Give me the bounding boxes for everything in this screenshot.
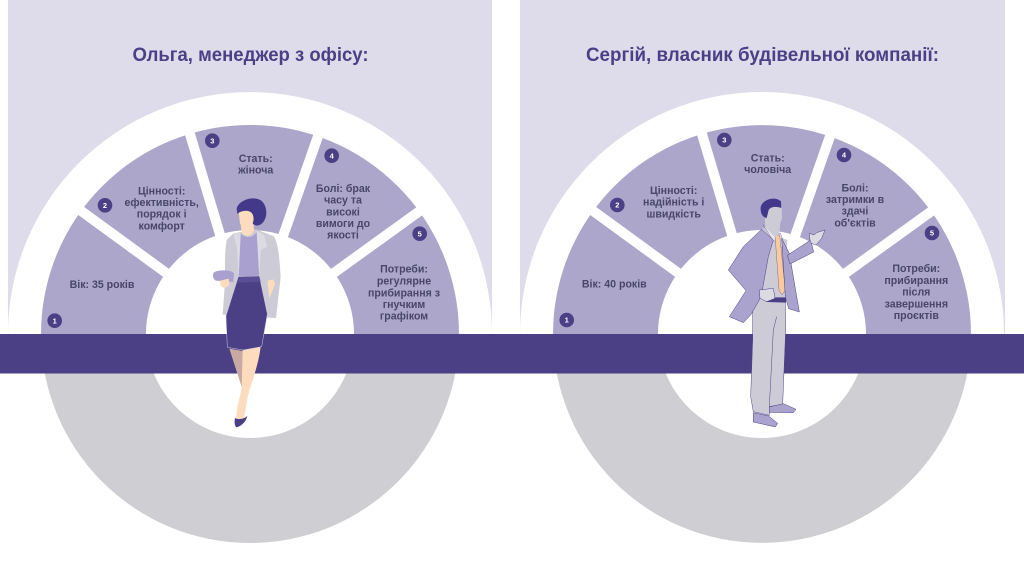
figure: man — [728, 199, 825, 427]
sector 3: gender: жіноча — [237, 165, 273, 177]
sector 2: values: 2 — [615, 201, 619, 210]
sector 5: needs: проєктів — [894, 310, 939, 322]
white semicircle: Serhii — [520, 92, 1004, 334]
sector 5: needs: графіком — [380, 311, 428, 323]
panel: Olha persona — [8, 0, 492, 543]
sector 3: gender: чоловіча — [744, 164, 791, 176]
sector 5: needs: прибирання з — [368, 287, 440, 299]
sector 4: pains: об'єктів — [834, 217, 876, 229]
sector 1: age: 1 — [565, 316, 569, 325]
horizontal band — [0, 334, 1024, 374]
sector 3: gender: Стать: — [751, 152, 785, 164]
sector 2: values — [98, 185, 199, 232]
title: Olha: Ольга, менеджер з офісу: — [132, 45, 368, 66]
sector 4: pains: вимоги до — [316, 218, 371, 230]
sector 5: needs: Потреби: — [892, 263, 940, 275]
sector 1: age — [47, 279, 135, 328]
sector 4: pains: 4 — [842, 151, 847, 160]
lavender backdrop: Serhii — [520, 0, 1005, 334]
sector 4: pains: часу та — [324, 195, 362, 207]
sector 4: pains: Болі: брак — [316, 183, 371, 195]
sector 4: pains: високі — [326, 206, 360, 218]
sector 1: age: Вік: 40 років — [582, 278, 647, 290]
sector 1: age: 1 — [53, 316, 57, 325]
sector 5: needs — [884, 226, 948, 322]
lavender backdrop: Olha — [8, 0, 492, 334]
sector 5: needs: після — [902, 287, 930, 299]
sector 1: age — [559, 278, 647, 327]
title: Serhii: Сергій, власник будівельної компанії: — [586, 45, 939, 66]
sector 3: gender — [205, 133, 273, 177]
sector 4: pains: якості — [327, 230, 359, 242]
gray lower ring: Serhii — [553, 334, 971, 543]
sector 4: pains: здачі — [842, 206, 868, 218]
sector 5: needs: гнучким — [383, 299, 425, 311]
figure: woman — [213, 198, 281, 427]
sector 5: needs: Потреби: — [380, 264, 428, 276]
sector 4: pains: затримки в — [826, 194, 885, 206]
sector 3: gender: 3 — [722, 136, 726, 145]
sector 5: needs: регулярне — [377, 276, 431, 288]
sector 3: gender: 3 — [210, 136, 214, 145]
sector 2: values — [610, 185, 704, 220]
white semicircle: Olha — [8, 92, 492, 334]
sector 4: pains: 4 — [330, 151, 335, 160]
sector 5: needs: 5 — [930, 229, 934, 238]
sector 2: values: Цінності: — [138, 185, 185, 197]
sector 5: needs: завершення — [885, 298, 948, 310]
sector 2: values: 2 — [103, 201, 107, 210]
sector ring: Serhii — [553, 114, 971, 334]
sector 2: values: ефективність, — [125, 197, 199, 209]
sector 2: values: швидкість — [646, 208, 701, 220]
sector 5: needs — [368, 226, 440, 323]
sector 5: needs: прибирання — [884, 275, 948, 287]
sector 5: needs: 5 — [418, 229, 422, 238]
sector 1: age: Вік: 35 років — [70, 279, 135, 291]
panel: Serhii persona — [520, 0, 1005, 543]
sector 2: values: комфорт — [139, 220, 185, 232]
sector ring: Olha — [41, 114, 459, 334]
sector 2: values: порядок і — [137, 209, 187, 221]
sector 4: pains — [316, 148, 371, 242]
sector 3: gender — [717, 133, 791, 176]
sector 2: values: Цінності: — [650, 185, 697, 197]
sector 4: pains — [826, 148, 885, 229]
sector 4: pains: Болі: — [841, 182, 869, 194]
sector 3: gender: Стать: — [239, 153, 273, 165]
sector 2: values: надійність і — [643, 197, 704, 209]
gray lower ring: Olha — [41, 334, 459, 543]
